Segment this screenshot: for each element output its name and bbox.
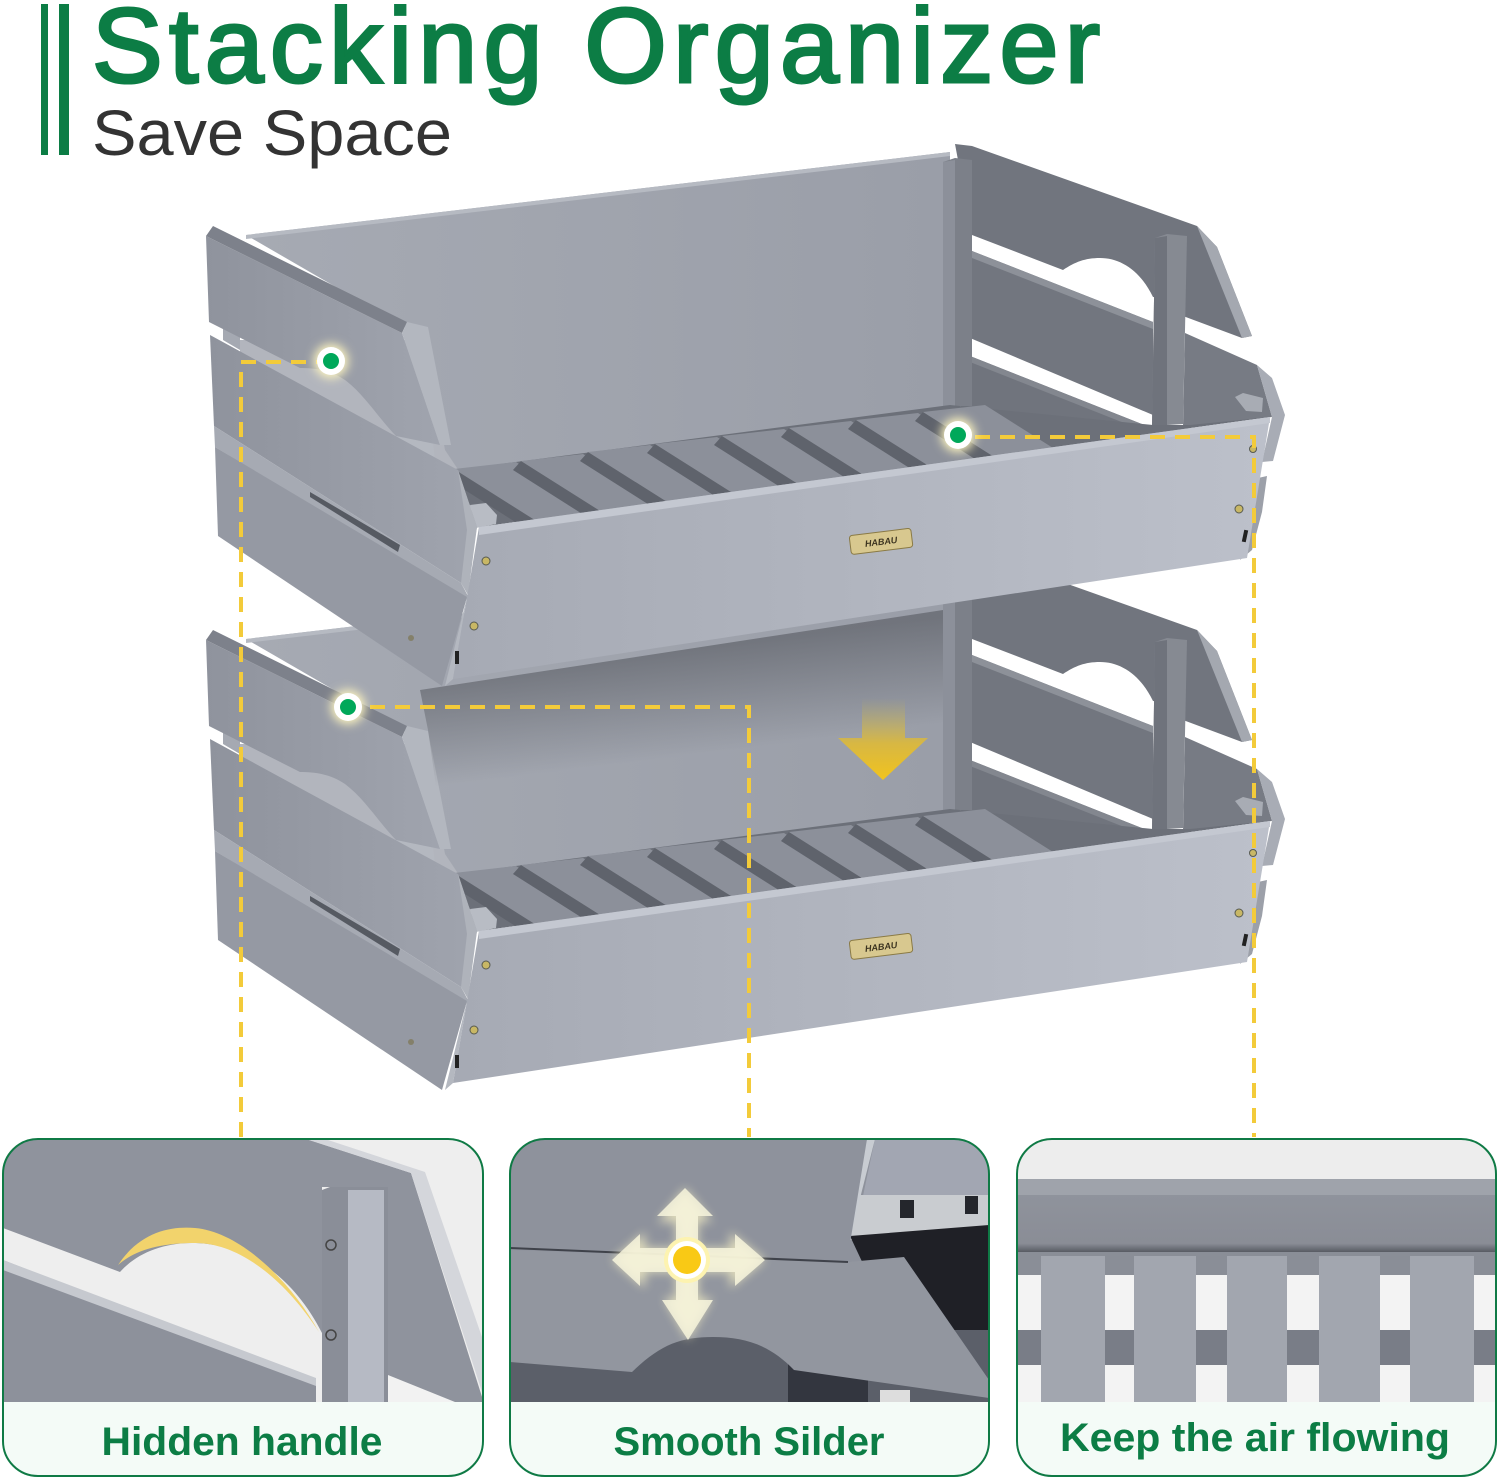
- title bars: [41, 4, 69, 155]
- brand plate lower: HABAU: [864, 940, 898, 954]
- callout line: smooth slider: [370, 707, 749, 1137]
- brand plate upper: HABAU: [864, 535, 898, 549]
- label: air flow: Keep the air flowing: [1060, 1416, 1450, 1460]
- lower crate: [206, 548, 1285, 1090]
- panel: smooth slider: [510, 1139, 989, 1476]
- upper crate: [206, 144, 1285, 686]
- subtitle: Save Space: [92, 97, 452, 169]
- brand plate upper: [849, 528, 913, 555]
- brand plate lower: [849, 933, 913, 960]
- arrow: stacking down: [838, 698, 928, 780]
- marker: air flow: [941, 418, 975, 452]
- panel: hidden handle: [3, 1139, 483, 1476]
- marker: slider: [331, 690, 365, 724]
- marker: handle: [314, 344, 348, 378]
- panel: air flow: [1017, 1139, 1496, 1476]
- callout line: hidden handle: [241, 362, 318, 1137]
- label: smooth slider: Smooth Silder: [614, 1420, 884, 1464]
- label: hidden handle: Hidden handle: [102, 1420, 382, 1464]
- shadow from upper crate: [420, 610, 943, 850]
- callout line: air flow: [975, 437, 1254, 1137]
